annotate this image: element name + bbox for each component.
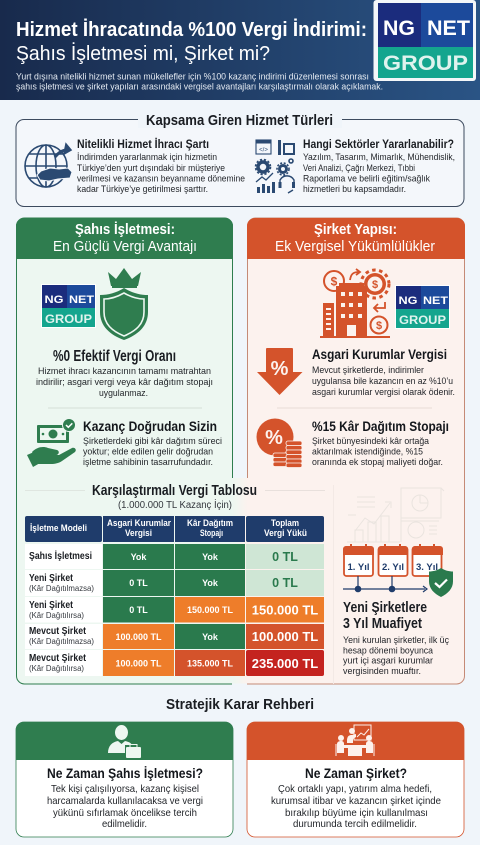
logo: small right: NET — [423, 295, 448, 307]
table row: new company, distributed: Yeni Şirket — [29, 600, 74, 611]
calendar: year 2: 2. Yıl — [382, 562, 404, 573]
calendar: year 1: 1. Yıl — [347, 562, 370, 573]
table row: existing company, no distribution: 100.000 TL — [115, 632, 162, 642]
text: company guidance: Ne Zaman Şirket? — [305, 765, 407, 781]
logo: small left: GROUP — [45, 312, 92, 326]
header banner — [0, 0, 480, 100]
icon: building with money gears — [320, 269, 390, 338]
text: minimum corporate tax: Mevcut şirketlerde, indirimler — [312, 364, 424, 375]
title: Şahıs İşletmesi mi, Şirket mi? — [16, 42, 270, 65]
table row: existing company, distributed: Mevcut Şirket — [29, 653, 87, 664]
arrow: timeline — [343, 576, 427, 592]
table row: existing company, distributed: 135.000 TL — [187, 658, 234, 668]
logo: small left — [41, 284, 96, 328]
text: direct income: Kazanç Doğrudan Sizin — [83, 419, 217, 434]
header description — [16, 70, 383, 92]
text: qualifying service condition — [77, 137, 245, 194]
table header row: Vergi Yükü — [264, 528, 307, 538]
heading: covered services: Kapsama Giren Hizmet Türleri — [146, 112, 333, 129]
text: zero effective tax rate: Hizmet ihracı kazancının tamamı matrahtan — [38, 365, 211, 376]
logo: NG NET GROUP: GROUP — [383, 52, 468, 75]
timeline: three exemption years — [343, 544, 453, 597]
icon: percent with coins: % — [265, 427, 283, 449]
panel header: company structure: Şirket Yapısı: — [314, 222, 397, 238]
panel header: sole proprietorship: Şahıs İşletmesi: — [75, 221, 175, 238]
text: profit distribution withholding: %15 Kâr Dağıtım Stopajı — [312, 419, 449, 434]
text: eligible sectors: Raporlama ve belirli eğitim/sağlık — [303, 172, 430, 184]
icon: building with money gears: $ — [331, 274, 338, 288]
logo: NG NET GROUP — [374, 0, 476, 81]
table row: new company, no distribution — [25, 570, 324, 596]
text: company guidance: Çok ortaklı yapı, yatırım alma hedefi, — [278, 784, 432, 795]
table row: new company, distributed: 150.000 TL — [187, 605, 234, 615]
text: qualifying service condition: Türkiye’den yurt dışındaki bir müşteriye — [77, 162, 225, 173]
logo: small left: NG — [44, 294, 64, 306]
icons: sectors: </> — [259, 148, 268, 154]
text: sole proprietorship guidance: Ne Zaman Şahıs İşletmesi? — [47, 765, 203, 781]
panel: company structure — [247, 218, 465, 684]
text: sole proprietorship guidance: harcamalarda kullanılacaksa ve vergi — [47, 796, 203, 807]
table row: existing company, distributed: 100.000 TL — [115, 658, 162, 668]
table heading: Karşılaştırmalı Vergi Tablosu — [92, 482, 257, 499]
text: three-year exemption: hesap dönemi boyunca — [343, 644, 434, 656]
table row: existing company, no distribution — [25, 624, 324, 649]
heading: strategic decision guide: Stratejik Karar Rehberi — [166, 696, 314, 713]
text: three-year exemption: yurt içi asgari kurumlar — [343, 654, 433, 666]
icon: businessperson with briefcase — [108, 725, 141, 758]
table row: new company, no distribution: (Kâr Dağıtılmazsa) — [29, 583, 94, 593]
text: eligible sectors: Veri Analizi, Çağrı Merkezi, Tıbbi — [303, 162, 415, 173]
text: direct income: yoktur; elde edilen gelir doğrudan — [83, 446, 213, 456]
text: company guidance — [271, 765, 441, 830]
icon: meeting with chart — [336, 725, 374, 756]
panel header: sole proprietorship — [16, 218, 233, 259]
text: sole proprietorship guidance: yükünü sıfırlamak öncelikse tercih — [53, 808, 197, 819]
text: minimum corporate tax: uygulansa bile kazancın en az %10’u — [312, 375, 453, 386]
panel: covered service types — [16, 112, 464, 206]
text: eligible sectors — [303, 137, 455, 194]
text: sole proprietorship guidance — [47, 765, 203, 830]
table row: sole proprietorship: 0 TL — [272, 550, 298, 564]
table row: sole proprietorship: Yok — [202, 552, 219, 562]
table row: sole proprietorship — [25, 544, 324, 569]
icon: faint chart and report background — [347, 488, 444, 542]
text: minimum corporate tax — [312, 347, 455, 397]
icon: cash in hand — [27, 418, 76, 467]
card: when company — [247, 722, 464, 837]
header description: Yurt dışına nitelikli hizmet sunan mükellefler için %100 kazanç indirimi düzenlemesi sonrası — [16, 70, 369, 82]
table header row — [25, 516, 324, 542]
text: profit distribution withholding — [312, 419, 449, 467]
logo: small right: GROUP — [399, 313, 446, 327]
logo: small right: NG — [398, 295, 418, 307]
text: zero effective tax rate: %0 Efektif Vergi Oranı — [53, 348, 176, 365]
text: profit distribution withholding: Şirket bünyesindeki kâr ortağa — [312, 435, 430, 446]
title — [16, 18, 367, 65]
text: three-year exemption: vergisinden muaftır. — [343, 665, 421, 676]
table row: new company, no distribution: Yok — [202, 578, 219, 588]
panel header: company structure: Ek Vergisel Yükümlülükler — [275, 239, 435, 255]
table header row: Toplam — [271, 518, 299, 528]
panel: sole proprietorship — [16, 218, 233, 684]
table row: existing company, distributed — [25, 650, 324, 676]
table row: new company, no distribution: 0 TL — [129, 578, 148, 588]
title: Hizmet İhracatında %100 Vergi İndirimi: — [16, 18, 367, 41]
text: qualifying service condition: Nitelikli Hizmet İhracı Şartı — [77, 137, 209, 151]
text: qualifying service condition: İndirimden yararlanmak için hizmetin — [77, 151, 217, 162]
table row: existing company, no distribution: Mevcut Şirket — [29, 626, 87, 637]
text: minimum corporate tax: asgari kurumlar vergisi olarak ödenir. — [312, 386, 455, 397]
table header row: Vergisi — [125, 528, 152, 538]
text: eligible sectors: Hangi Sektörler Yararlanabilir? — [303, 137, 454, 151]
table row: existing company, no distribution: (Kâr Dağıtılmazsa) — [29, 636, 94, 646]
table header row: Asgari Kurumlar — [107, 518, 171, 528]
table row: new company, distributed: 0 TL — [129, 605, 148, 615]
table row: existing company, distributed: (Kâr Dağıtılırsa) — [29, 663, 84, 673]
text: three-year exemption: Yeni kurulan şirketler, ilk üç — [343, 634, 449, 645]
icon: percent with coins — [256, 418, 302, 468]
table row: new company, distributed: (Kâr Dağıtılırsa) — [29, 610, 84, 620]
text: company guidance: durumunda tercih edilmelidir. — [293, 819, 417, 830]
text: qualifying service condition: verilmesi ve kazansın beyanname dönemine — [77, 172, 245, 184]
text: company guidance: kurumsal itibar ve kazancın şirket içinde — [271, 796, 441, 807]
table heading — [92, 482, 257, 511]
table row: existing company, no distribution: 100.000 TL — [252, 629, 318, 644]
text: direct income — [83, 419, 222, 467]
table row: existing company, distributed: 235.000 TL — [252, 656, 318, 671]
table header row: Kâr Dağıtım — [187, 518, 233, 528]
text: direct income: işletme sahibinin tasarrufundadır. — [83, 456, 213, 467]
text: direct income: Şirketlerdeki gibi kâr dağıtım süreci — [83, 435, 222, 446]
icon: building with money gears: $ — [372, 279, 378, 291]
logo: small left: NET — [69, 294, 94, 306]
text: qualifying service condition: kadar Türkiye’ye getirilmesi şarttır. — [77, 183, 208, 194]
icon: globe with arrow — [25, 144, 72, 187]
table section: comparative tax table — [25, 482, 325, 676]
text: company guidance: bırakılıp büyüme için kullanılması — [285, 808, 428, 819]
card: when sole proprietorship — [16, 722, 233, 837]
logo: NG NET GROUP: NG — [383, 17, 415, 40]
table row: existing company, no distribution: Yok — [202, 632, 219, 642]
table row: new company, distributed: 150.000 TL — [252, 602, 318, 618]
text: minimum corporate tax: Asgari Kurumlar Vergisi — [312, 347, 447, 362]
icon: green check shield — [429, 568, 453, 597]
icon: percent down arrow — [257, 348, 302, 395]
icon: shield with crown — [100, 268, 148, 340]
text: three-year exemption — [343, 599, 449, 676]
text: zero effective tax rate: uygulanmaz. — [99, 387, 148, 398]
icons: sectors — [256, 140, 295, 193]
text: sole proprietorship guidance: Tek kişi çalışılıyorsa, kazanç kişisel — [51, 784, 199, 795]
text: three-year exemption: Yeni Şirketlere — [343, 599, 427, 616]
icon: building with money gears: $ — [376, 320, 382, 332]
header description: şahıs işletmesi ve şirket yapıları arasındaki vergisel avantajları karşılaştırmalı olarak açıklamak. — [16, 80, 383, 92]
panel header: company structure — [247, 218, 465, 259]
text: three-year exemption: 3 Yıl Muafiyet — [343, 615, 422, 632]
table row: new company, no distribution: 0 TL — [272, 576, 298, 590]
table heading: (1.000.000 TL Kazanç İçin) — [118, 498, 232, 511]
panel header: sole proprietorship: En Güçlü Vergi Avantajı — [53, 239, 197, 255]
text: zero effective tax rate — [36, 348, 213, 398]
text: eligible sectors: hizmetleri bu kapsamdadır. — [303, 183, 406, 194]
text: zero effective tax rate: indirilir; asgari vergi veya kâr dağıtım stopajı — [36, 376, 213, 387]
table header row: Stopajı — [200, 528, 223, 538]
table row: new company, no distribution: Yeni Şirket — [29, 573, 74, 584]
text: sole proprietorship guidance: edilmelidir. — [102, 819, 147, 830]
table row: new company, distributed — [25, 597, 324, 622]
icon: percent down arrow: % — [271, 358, 289, 380]
table row: sole proprietorship: Şahıs İşletmesi — [29, 549, 92, 562]
calendar: year 3: 3. Yıl — [416, 562, 438, 573]
table header row: İşletme Modeli — [30, 523, 87, 533]
logo: small right — [395, 285, 450, 329]
table row: sole proprietorship: Yok — [131, 552, 147, 562]
logo: NG NET GROUP: NET — [427, 17, 470, 40]
text: profit distribution withholding: aktarılmak istendiğinde, %15 — [312, 446, 423, 456]
text: eligible sectors: Yazılım, Tasarım, Mimarlık, Mühendislik, — [303, 151, 455, 162]
text: profit distribution withholding: oranında ek stopaj maliyeti doğar. — [312, 456, 443, 467]
